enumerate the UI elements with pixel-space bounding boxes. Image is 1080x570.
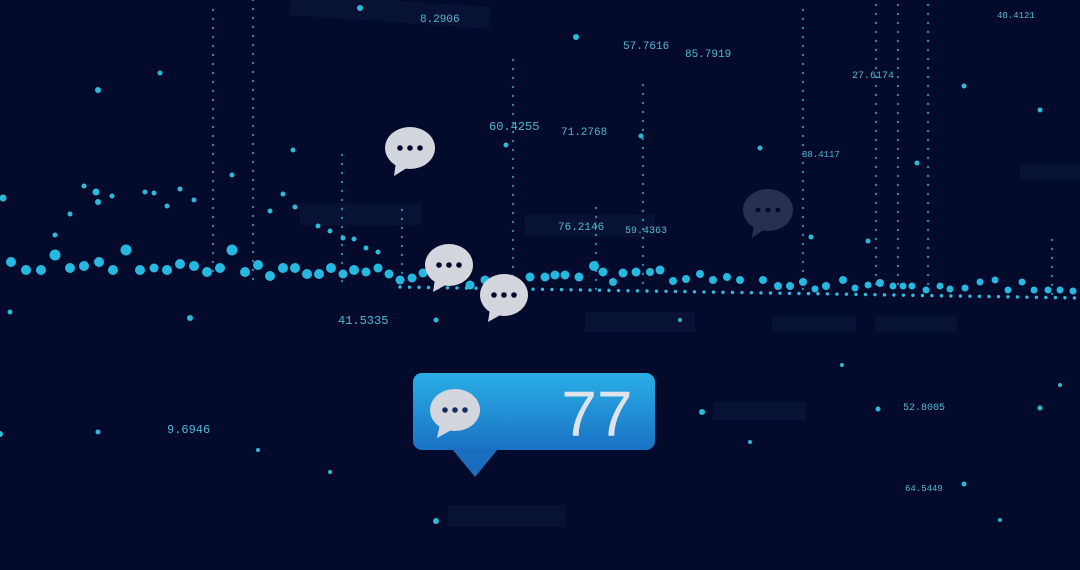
numeric labels: 64.5449 (905, 484, 943, 494)
small dot row (400, 287, 1080, 298)
numeric labels: 27.6174 (852, 71, 894, 82)
numeric labels: 40.4121 (997, 11, 1035, 21)
numeric labels: 57.7616 (623, 41, 669, 53)
numeric labels: 52.8005 (903, 403, 945, 414)
numeric labels: 85.7919 (685, 49, 731, 61)
faint panels (289, 0, 1080, 527)
icon: chat bubble middle (425, 244, 473, 292)
numeric labels: 76.2146 (558, 222, 604, 234)
numeric labels: 41.5335 (338, 314, 388, 328)
icon: badge chat bubble (430, 389, 480, 438)
numeric labels: 71.2768 (561, 127, 607, 139)
numeric labels (167, 11, 1035, 494)
numeric labels: 59.4363 (625, 226, 667, 237)
numeric labels: 8.2906 (420, 14, 460, 26)
icon: chat bubble top (385, 127, 435, 176)
vertical dotted lines (213, 0, 1052, 295)
notification badge (413, 373, 655, 477)
icon: chat bubble lower (480, 274, 528, 322)
numeric labels: 60.4255 (489, 120, 539, 134)
numeric labels: 38.4117 (802, 150, 840, 160)
numeric labels: 9.6946 (167, 423, 210, 437)
data wave (6, 244, 1076, 294)
icon: faded chat bubble (743, 189, 793, 238)
badge count: 77 (561, 378, 633, 450)
